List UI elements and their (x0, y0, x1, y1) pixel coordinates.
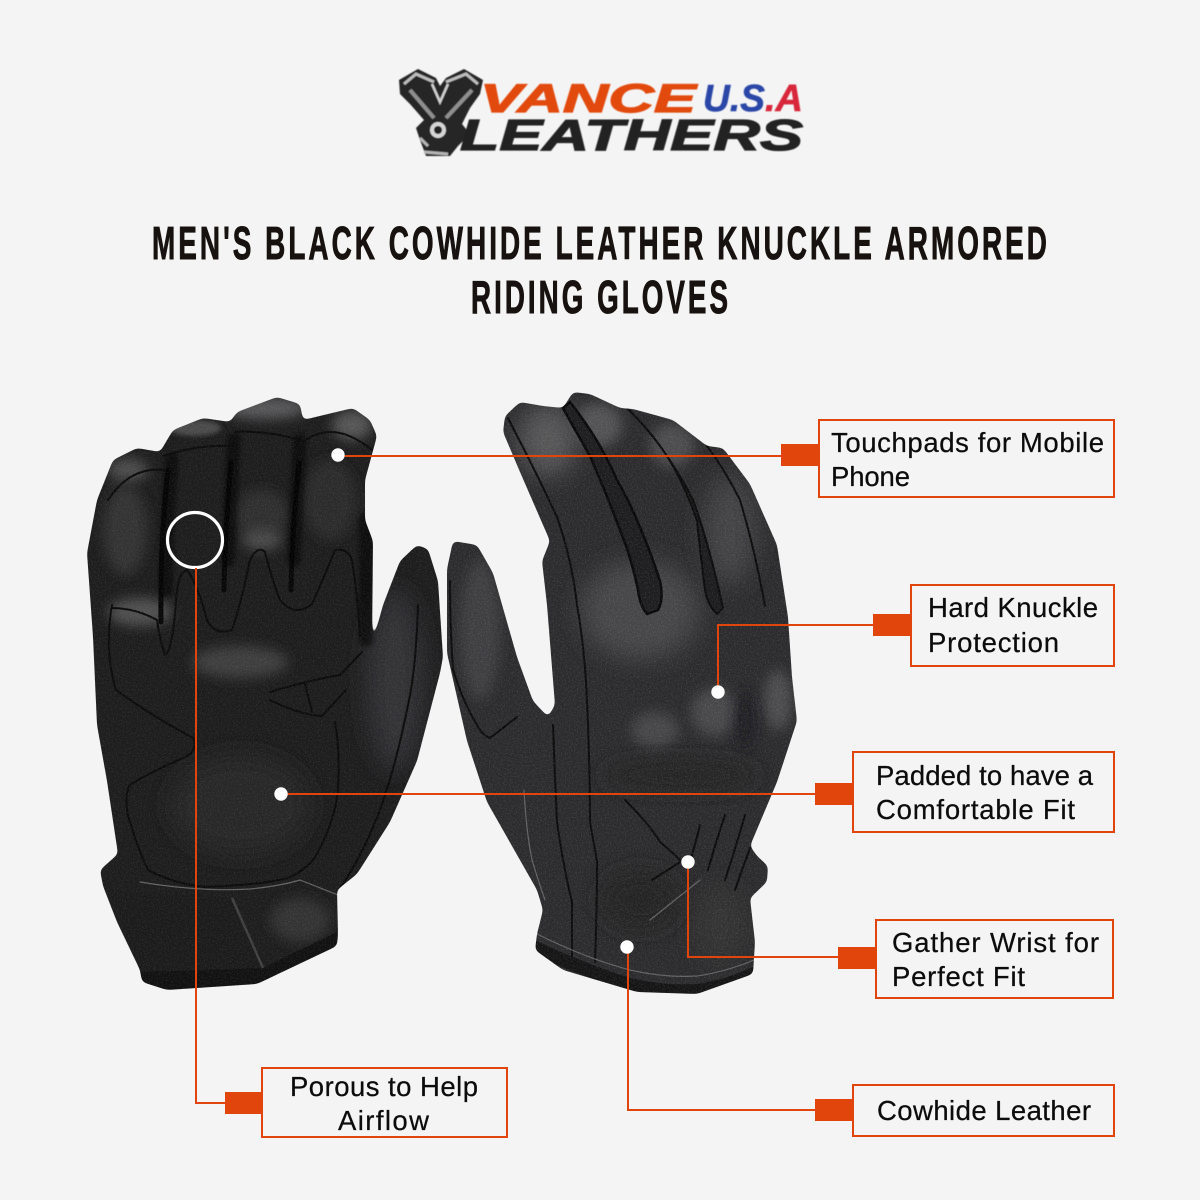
callout: touchpads (331, 420, 1114, 497)
logo word: U.S.A: .A (765, 78, 803, 120)
callout: padded fit: Comfortable Fit (876, 794, 1075, 825)
callout: padded fit: Padded to have a (876, 760, 1094, 791)
callout: gather wrist (681, 855, 1113, 998)
leather grain (447, 393, 796, 994)
thumb seam (340, 605, 418, 888)
callout: cowhide leather (620, 940, 1114, 1136)
thumb seam (450, 581, 517, 738)
icon: engine (399, 69, 483, 156)
finger valley seam (112, 550, 360, 655)
title line 2: RIDING GLOVES (471, 271, 731, 323)
logo: Vance Leathers USA (399, 69, 803, 160)
callout: knuckle protection (711, 585, 1114, 699)
logo word: LEATHERS: LEATHERS (460, 111, 803, 160)
strap (108, 890, 263, 974)
finger slit 1 (563, 402, 662, 614)
palm pad seam (109, 605, 339, 887)
finger slit 3 (707, 446, 765, 606)
finger slit 2 (627, 408, 723, 614)
logo word: VANCE: VANCE (480, 77, 698, 121)
callout: porous airflow: Airflow (338, 1105, 429, 1136)
cuff hem (533, 940, 755, 998)
leather grain (87, 398, 442, 990)
callout: knuckle protection: Protection (928, 627, 1059, 658)
wrist gathers (625, 800, 750, 890)
logo word: U.S.A (703, 78, 803, 120)
fingertip seams (108, 432, 372, 500)
thumb base seams (270, 652, 362, 716)
callout: gather wrist: Perfect Fit (892, 961, 1025, 992)
callout: gather wrist: Gather Wrist for (892, 927, 1099, 958)
callout: porous airflow: Porous to Help (290, 1071, 478, 1102)
logo word: U.S.A: U.S (703, 78, 765, 120)
title (152, 217, 1050, 323)
callout: touchpads: Phone (831, 461, 910, 492)
callout: knuckle protection: Hard Knuckle (928, 592, 1098, 623)
marker: porous circle (168, 512, 222, 568)
finger gaps (161, 440, 366, 640)
glove: back of hand (447, 392, 797, 994)
side seams (508, 418, 597, 962)
callout: porous airflow (196, 568, 507, 1137)
callout: cowhide leather: Cowhide Leather (877, 1095, 1091, 1126)
glove: palm side (87, 398, 443, 990)
callout: touchpads: Touchpads for Mobile (831, 427, 1104, 458)
callout: padded fit (274, 752, 1114, 832)
